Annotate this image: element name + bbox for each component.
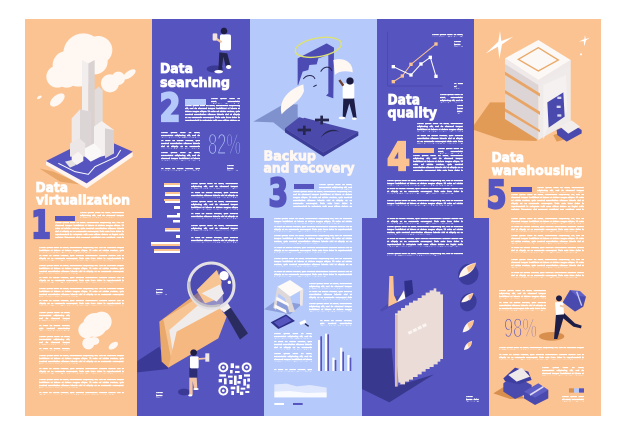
heading: Data quality: quality [388,106,437,122]
line chart [388,32,443,86]
illustration: warehouse building with sparkles [474,31,590,142]
illustration: stack of boxes [493,368,548,405]
heading: Data quality: Data [388,92,420,108]
numeral 3: 3 [268,171,288,215]
illustration: document with wings and person [253,34,358,157]
stat: 82%: 82% [208,129,241,161]
panel: data warehousing background [474,19,601,416]
horizontal bar chart [151,183,180,253]
numeral 4: 4 [387,135,410,179]
heading: Data warehousing: Data [492,150,524,166]
illustration: person with phone [207,28,231,73]
heading: Data warehousing: warehousing [492,163,582,179]
illustration: stool, book and tools [264,280,309,329]
stat: 98%: 98% [504,313,537,343]
illustration: clouds and skyscraper on a platform [36,33,137,188]
illustration: man carrying a box [539,290,586,341]
panel: data quality background [362,19,489,416]
QR code [219,363,251,395]
heading: Backup and recovery: and recovery [264,160,355,176]
area chart with legend [274,384,327,405]
numeral 2: 2 [160,86,180,130]
bars next to numerals [55,99,532,221]
panel: backup and recovery background [250,19,377,416]
numeral 1: 1 [31,203,51,247]
illustration: cloud group [78,312,119,351]
column chart [318,334,351,371]
illustration: folder under magnifying glass [137,263,248,396]
illustration: pixelated document and chart [362,260,482,402]
colour swatches [569,388,584,393]
panel: data virtualization background [25,19,152,416]
heading: Backup and recovery: Backup [264,148,316,164]
numeral 5: 5 [486,173,506,217]
heading: Data virtualization: Data [36,180,68,196]
heading: Data virtualization: virtualization [36,192,130,208]
panel: data searching background [137,19,264,416]
heading: Data searching: searching [160,75,230,91]
heading: Data searching: Data [160,61,193,77]
